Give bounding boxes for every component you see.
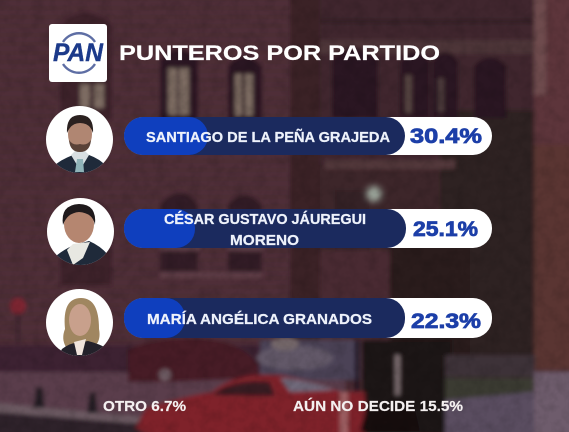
logo: PAN: PAN [53,39,104,67]
name: María: MARÍA ANGÉLICA GRANADOS [147,311,372,328]
logo: PAN [49,24,107,82]
label: Aún no decide: AÚN NO DECIDE 15.5% [293,397,463,415]
red sign [10,298,26,314]
label: Otro: OTRO 6.7% [103,398,186,415]
bar: César [124,209,492,249]
bar: Santiago [124,117,492,155]
name: Santiago: SANTIAGO DE LA PEÑA GRAJEDA [146,128,390,146]
cars [128,338,260,382]
candidate photo: César [47,198,114,265]
value: 30.4%: 30.4% [410,124,482,148]
arches and windows [60,12,506,285]
candidate photo: Santiago [46,106,113,173]
name: César [164,211,366,249]
value: 22.3%: 22.3% [411,309,481,333]
candidate photo: María [46,289,113,356]
bar: María [124,298,492,338]
value: 25.1%: 25.1% [413,217,478,241]
title: PUNTEROS POR PARTIDO [119,41,440,65]
name: César: MORENO [230,233,299,249]
street level [0,345,345,375]
name: César: CÉSAR GUSTAVO JÁUREGUI [164,211,366,228]
